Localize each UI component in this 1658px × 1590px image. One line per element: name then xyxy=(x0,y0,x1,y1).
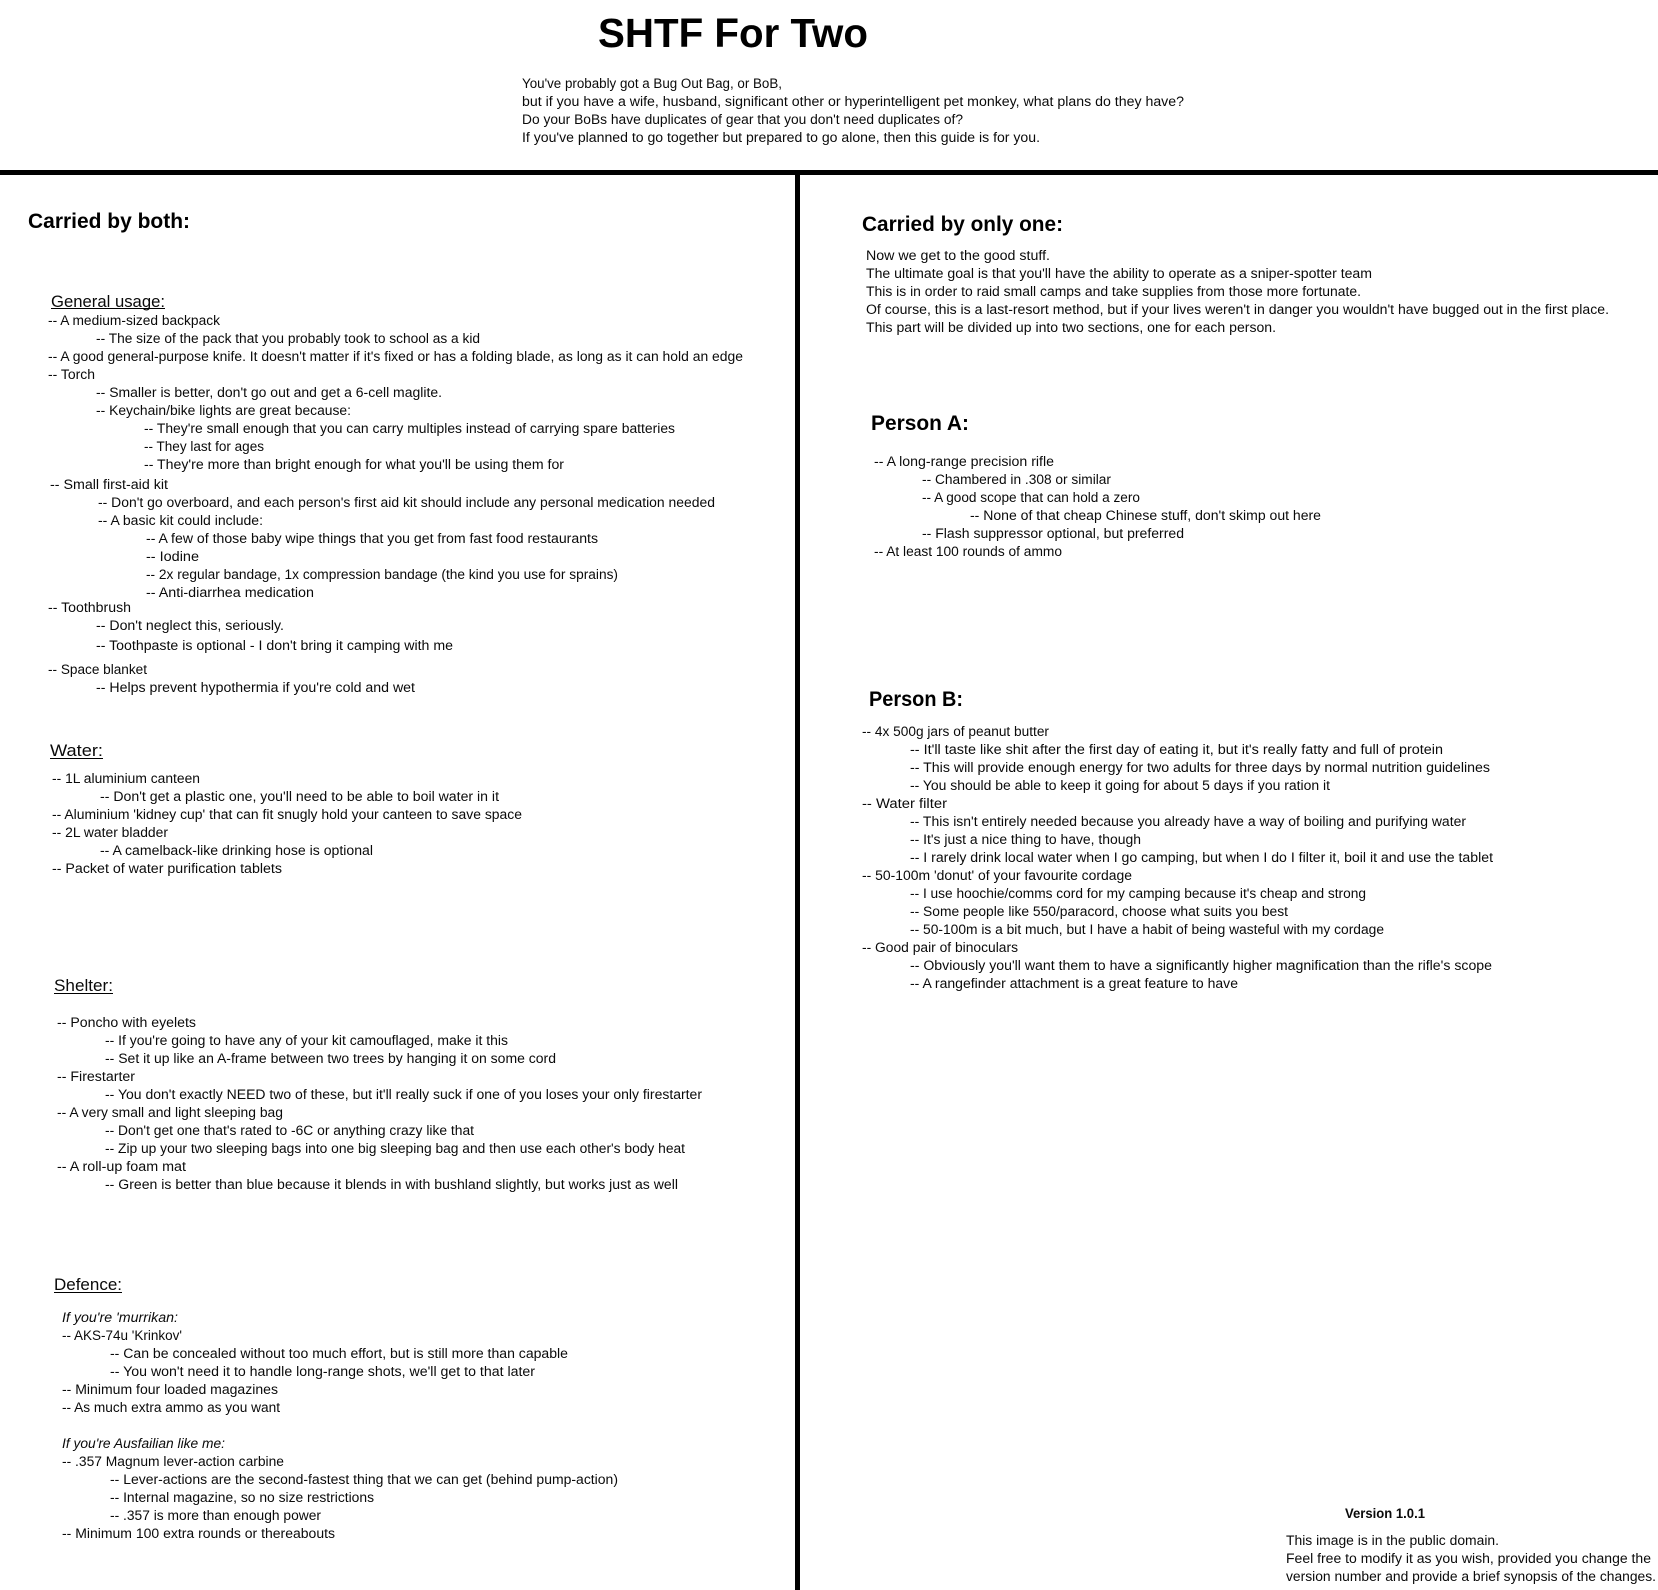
title: SHTF For Two xyxy=(598,10,868,56)
section: shelter: -- Firestarter xyxy=(57,1069,136,1084)
section: person B: -- A rangefinder attachment is a great feature to have xyxy=(910,976,1238,991)
section: shelter: -- Set it up like an A-frame between two trees by hanging it on some cord xyxy=(105,1051,556,1066)
section: defence: -- Lever-actions are the second-fastest thing that we can get (behind pump-action) xyxy=(110,1472,618,1487)
section: defence: -- Minimum 100 extra rounds or thereabouts xyxy=(62,1526,335,1541)
panel: carried by only one xyxy=(862,213,1609,991)
intro text: carried by only one: Of course, this is a last-resort method, but if your lives weren't in danger you wouldn't have bugged out in the first place. xyxy=(866,302,1609,317)
section: person B: -- Obviously you'll want them to have a significantly higher magnification than the rifle's scope xyxy=(910,958,1492,973)
section: general usage: -- They last for ages xyxy=(144,439,264,454)
public domain note: version number and provide a brief synopsis of the changes. xyxy=(1286,1569,1656,1584)
section: defence: -- .357 is more than enough power xyxy=(110,1508,322,1523)
intro text: carried by only one: This part will be divided up into two sections, one for each person. xyxy=(866,320,1276,335)
section: general usage: -- Don't go overboard, and each person's first aid kit should include any personal medication needed xyxy=(98,495,715,510)
section: person B: -- It'll taste like shit after the first day of eating it, but it's really fatty and full of protein xyxy=(910,742,1443,757)
section: person A: -- Chambered in .308 or similar xyxy=(922,472,1112,487)
intro text: carried by only one: This is in order to raid small camps and take supplies from those more fortunate. xyxy=(866,284,1361,299)
section: general usage: -- Don't neglect this, seriously. xyxy=(96,618,284,633)
version number: Version 1.0.1 xyxy=(1345,1506,1425,1521)
intro text: carried by only one xyxy=(866,248,1609,335)
intro text: carried by only one: The ultimate goal is that you'll have the ability to operate as a sniper-spotter team xyxy=(866,266,1372,281)
heading: carried by only one: Carried by only one: xyxy=(862,213,1063,236)
section: person B: -- 4x 500g jars of peanut butter xyxy=(862,724,1049,739)
section: shelter: -- A roll-up foam mat xyxy=(57,1159,186,1174)
subheading: defence: Defence: xyxy=(54,1275,122,1294)
subheading: shelter: Shelter: xyxy=(54,976,113,995)
intro text block: You've probably got a Bug Out Bag, or BoB, xyxy=(522,76,782,91)
section: defence: If you're Ausfailian like me: xyxy=(62,1436,225,1451)
section: defence: If you're 'murrikan: xyxy=(62,1310,178,1325)
section: defence xyxy=(54,1275,618,1541)
section: shelter: -- Zip up your two sleeping bags into one big sleeping bag and then use each other's body heat xyxy=(105,1141,685,1156)
section: person B: -- 50-100m is a bit much, but I have a habit of being wasteful with my cordage xyxy=(910,922,1384,937)
section: defence: -- Can be concealed without too much effort, but is still more than capable xyxy=(110,1346,568,1361)
section: water: -- A camelback-like drinking hose is optional xyxy=(100,843,373,858)
intro text block xyxy=(522,76,1184,145)
section: shelter: -- Poncho with eyelets xyxy=(57,1015,196,1030)
section: shelter xyxy=(54,976,703,1192)
section: person B xyxy=(862,688,1493,991)
section: person B: -- It's just a nice thing to have, though xyxy=(910,832,1141,847)
vertical divider xyxy=(795,175,800,1590)
section: general usage: -- A basic kit could include: xyxy=(98,513,263,528)
intro text: carried by only one: Now we get to the good stuff. xyxy=(866,248,1050,263)
horizontal divider xyxy=(0,170,1658,175)
section: water: -- Aluminium 'kidney cup' that can fit snugly hold your canteen to save space xyxy=(52,807,522,822)
section: water: -- 2L water bladder xyxy=(52,825,169,840)
section: person A: -- A good scope that can hold a zero xyxy=(922,490,1140,505)
section: shelter: -- Don't get one that's rated to -6C or anything crazy like that xyxy=(105,1123,474,1138)
section: general usage: -- Anti-diarrhea medication xyxy=(146,585,314,600)
section: person A: -- None of that cheap Chinese stuff, don't skimp out here xyxy=(970,508,1321,523)
section: general usage xyxy=(48,292,743,695)
section: defence: -- Minimum four loaded magazines xyxy=(62,1382,278,1397)
section: person B: -- This isn't entirely needed because you already have a way of boiling and purifying water xyxy=(910,814,1467,829)
public domain note xyxy=(1286,1533,1656,1584)
section: person A: -- Flash suppressor optional, but preferred xyxy=(922,526,1184,541)
section: defence: -- You won't need it to handle long-range shots, we'll get to that later xyxy=(110,1364,536,1379)
section: person B: -- Water filter xyxy=(862,796,948,811)
panel: carried by both xyxy=(28,210,743,1541)
section: general usage: -- A few of those baby wipe things that you get from fast food restaurants xyxy=(146,531,598,546)
section: defence: -- AKS-74u 'Krinkov' xyxy=(62,1328,182,1343)
section: general usage: -- 2x regular bandage, 1x compression bandage (the kind you use for sprains) xyxy=(146,567,618,582)
section: general usage: -- A good general-purpose knife. It doesn't matter if it's fixed or has a folding blade, as long as it can hold an edge xyxy=(48,349,743,364)
section: person B: -- Good pair of binoculars xyxy=(862,940,1018,955)
section: shelter: -- You don't exactly NEED two of these, but it'll really suck if one of you loses your only firestarter xyxy=(105,1087,703,1102)
section: general usage: -- The size of the pack that you probably took to school as a kid xyxy=(96,331,480,346)
public domain note: Feel free to modify it as you wish, provided you change the xyxy=(1286,1551,1651,1566)
section: person B: -- Some people like 550/paracord, choose what suits you best xyxy=(910,904,1288,919)
section: water: -- 1L aluminium canteen xyxy=(52,771,200,786)
section: person B: -- You should be able to keep it going for about 5 days if you ration it xyxy=(910,778,1330,793)
section: general usage: -- They're small enough that you can carry multiples instead of carrying spare batteries xyxy=(144,421,675,436)
section: person B: -- I use hoochie/comms cord for my camping because it's cheap and strong xyxy=(910,886,1366,901)
subheading: water: Water: xyxy=(50,741,103,760)
section: general usage: -- Helps prevent hypothermia if you're cold and wet xyxy=(96,680,415,695)
heading: carried by both: Carried by both: xyxy=(28,210,190,233)
section: general usage: -- A medium-sized backpack xyxy=(48,313,220,328)
section: shelter: -- Green is better than blue because it blends in with bushland slightly, but works just as well xyxy=(105,1177,678,1192)
section: general usage: -- Toothpaste is optional - I don't bring it camping with me xyxy=(96,638,453,653)
section: defence: -- Internal magazine, so no size restrictions xyxy=(110,1490,374,1505)
section: person A: -- A long-range precision rifle xyxy=(874,454,1054,469)
section: general usage: -- Toothbrush xyxy=(48,600,131,615)
section: person B: -- 50-100m 'donut' of your favourite cordage xyxy=(862,868,1132,883)
section: shelter: -- A very small and light sleeping bag xyxy=(57,1105,283,1120)
heading: person A: Person A: xyxy=(871,412,969,435)
section: person B: -- This will provide enough energy for two adults for three days by normal nutrition guidelines xyxy=(910,760,1490,775)
section: water: -- Don't get a plastic one, you'll need to be able to boil water in it xyxy=(100,789,499,804)
section: person A xyxy=(871,412,1321,559)
public domain note: This image is in the public domain. xyxy=(1286,1533,1499,1548)
section: defence: -- As much extra ammo as you want xyxy=(62,1400,280,1415)
section: general usage: -- Iodine xyxy=(146,549,199,564)
section: general usage: -- Torch xyxy=(48,367,95,382)
section: water xyxy=(50,741,522,876)
section: shelter: -- If you're going to have any of your kit camouflaged, make it this xyxy=(105,1033,508,1048)
section: defence: -- .357 Magnum lever-action carbine xyxy=(62,1454,284,1469)
intro text block: Do your BoBs have duplicates of gear that you don't need duplicates of? xyxy=(522,112,963,127)
section: person A: -- At least 100 rounds of ammo xyxy=(874,544,1062,559)
section: general usage: -- Smaller is better, don't go out and get a 6-cell maglite. xyxy=(96,385,442,400)
heading: person B: Person B: xyxy=(869,688,963,711)
section: person B: -- I rarely drink local water when I go camping, but when I do I filter it, boil it and use the tablet xyxy=(910,850,1493,865)
intro text block: If you've planned to go together but prepared to go alone, then this guide is for you. xyxy=(522,130,1040,145)
section: general usage: -- They're more than bright enough for what you'll be using them for xyxy=(144,457,565,472)
section: general usage: -- Keychain/bike lights are great because: xyxy=(96,403,351,418)
intro text block: but if you have a wife, husband, significant other or hyperintelligent pet monkey, what plans do they have? xyxy=(522,94,1184,109)
section: general usage: -- Small first-aid kit xyxy=(50,477,168,492)
section: general usage: -- Space blanket xyxy=(48,662,147,677)
subheading: general usage: General usage: xyxy=(51,292,165,311)
section: water: -- Packet of water purification tablets xyxy=(52,861,282,876)
version note xyxy=(1286,1506,1656,1584)
